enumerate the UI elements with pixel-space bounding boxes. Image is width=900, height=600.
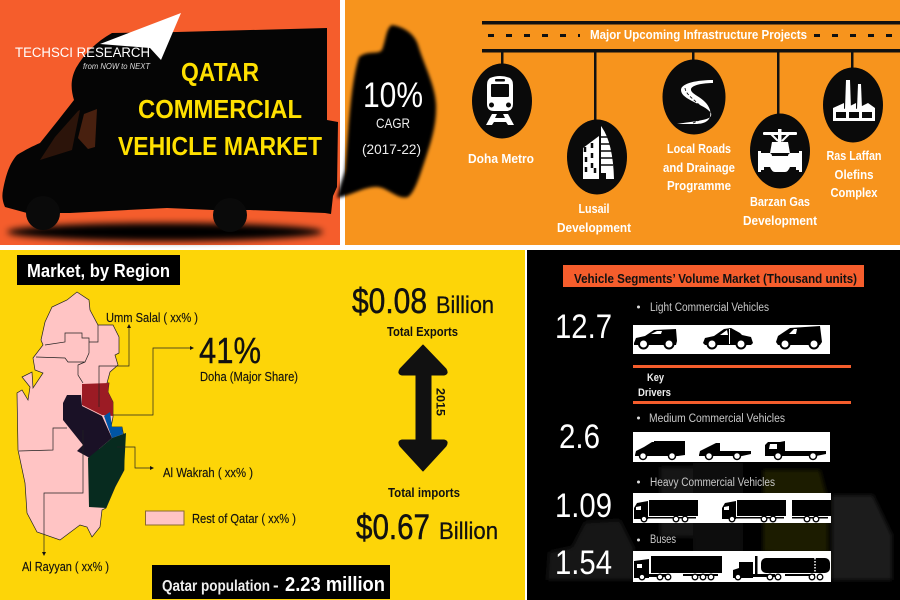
trade: imports: Total imports xyxy=(388,486,460,500)
project: Barzan Gas Development: Barzan Gas xyxy=(750,194,810,209)
segment: light commercial vehicles xyxy=(555,302,830,354)
double arrow with year: 2015 xyxy=(434,388,446,417)
project: Barzan Gas Development xyxy=(743,50,818,228)
CAGR blob: 10% xyxy=(363,76,423,115)
project: Barzan Gas Development: Development xyxy=(743,213,818,228)
trade: exports: $0.08 xyxy=(352,282,427,321)
title: VEHICLE MARKET xyxy=(118,131,322,161)
truck silhouette xyxy=(2,28,338,232)
region: Al Rayyan xyxy=(63,395,112,462)
leader lines xyxy=(44,327,191,553)
project: Lusail Development: Lusail xyxy=(578,201,610,216)
segment: light commercial vehicles: Light Commercial Vehicles xyxy=(650,302,769,314)
region: Al Wakrah xyxy=(88,433,126,508)
project: Local Roads and Drainage Programme: Local Roads xyxy=(667,141,731,156)
faded background vehicles xyxy=(547,463,892,580)
CAGR blob: CAGR xyxy=(376,115,410,131)
population callout: 2.23 million xyxy=(285,574,385,596)
project: Local Roads and Drainage Programme: and Drainage xyxy=(663,160,735,175)
project: Ras Laffan Olefins Complex: Complex xyxy=(830,185,878,200)
truck ground shadow xyxy=(7,223,323,241)
segment: buses: Buses xyxy=(650,534,676,546)
heading xyxy=(563,265,864,287)
segment: medium commercial vehicles: 2.6 xyxy=(559,418,600,456)
label: Al Rayyan: Al Rayyan ( xx% ) xyxy=(22,559,109,574)
segment: medium commercial vehicles: Medium Commercial Vehicles xyxy=(649,413,785,425)
legend: Rest of Qatar: Rest of Qatar ( xx% ) xyxy=(192,511,296,526)
key drivers xyxy=(633,365,851,404)
label: Doha share: Doha (Major Share) xyxy=(200,369,298,384)
segment: buses: 1.54 xyxy=(555,544,612,582)
label: Umm Salal: Umm Salal ( xx% ) xyxy=(106,310,198,325)
segment: heavy commercial vehicles: Heavy Commercial Vehicles xyxy=(650,477,775,489)
label: Doha share xyxy=(199,330,298,384)
title xyxy=(118,57,322,161)
road banner xyxy=(482,21,900,52)
title: QATAR xyxy=(181,57,259,87)
label: Doha share: 41% xyxy=(199,330,261,371)
trade: imports: Billion xyxy=(439,518,498,545)
segment: medium commercial vehicles xyxy=(559,413,830,462)
segment: buses xyxy=(555,534,831,582)
title: COMMERCIAL xyxy=(138,94,302,124)
trade: imports: $0.67 xyxy=(356,508,430,547)
panel: market by region xyxy=(0,250,525,600)
logo: TechSci Research: from NOW to NEXT xyxy=(83,61,151,71)
project: Ras Laffan Olefins Complex xyxy=(823,50,883,200)
segment: light commercial vehicles: 12.7 xyxy=(555,308,612,346)
project: Local Roads and Drainage Programme xyxy=(662,50,735,193)
road banner: Major Upcoming Infrastructure Projects xyxy=(590,27,807,42)
heading: Vehicle Segments’ Volume Market (Thousand units) xyxy=(574,271,857,286)
CAGR blob: (2017-22) xyxy=(362,141,421,157)
leader arrowheads xyxy=(42,324,194,556)
trade: exports xyxy=(352,282,494,339)
panel: infrastructure projects xyxy=(337,0,900,245)
heading xyxy=(17,255,180,285)
panel: truck hero xyxy=(0,0,340,245)
trade: exports: Total Exports xyxy=(387,325,458,339)
population callout: Qatar population xyxy=(162,578,270,595)
double arrow with year xyxy=(399,345,447,471)
project: Ras Laffan Olefins Complex: Olefins xyxy=(834,167,874,182)
logo: TechSci Research xyxy=(15,13,181,71)
trade: imports xyxy=(356,486,498,547)
project: Lusail Development: Development xyxy=(557,220,632,235)
logo: TechSci Research: TECHSCI RESEARCH xyxy=(15,45,150,60)
label: Al Wakrah: Al Wakrah ( xx% ) xyxy=(163,465,253,480)
project: Ras Laffan Olefins Complex: Ras Laffan xyxy=(826,148,882,163)
CAGR blob xyxy=(337,25,436,198)
project: Doha Metro: Doha Metro xyxy=(468,151,534,166)
region: Doha xyxy=(82,383,113,416)
panel: vehicle segments xyxy=(527,250,900,600)
trade: exports: Billion xyxy=(436,292,494,319)
segment: heavy commercial vehicles xyxy=(555,477,831,525)
project: Local Roads and Drainage Programme: Programme xyxy=(667,178,731,193)
legend: Rest of Qatar xyxy=(146,511,296,526)
map of Qatar xyxy=(17,292,194,556)
project: Lusail Development xyxy=(557,50,632,235)
project: Doha Metro xyxy=(468,50,534,166)
key drivers: Drivers xyxy=(638,387,671,399)
segment: heavy commercial vehicles: 1.09 xyxy=(555,487,612,525)
key drivers: Key xyxy=(647,372,665,384)
region: Umm Salal xyxy=(104,412,123,438)
heading: Market, by Region xyxy=(27,261,170,281)
population callout xyxy=(152,565,390,599)
population callout: - xyxy=(273,576,279,595)
